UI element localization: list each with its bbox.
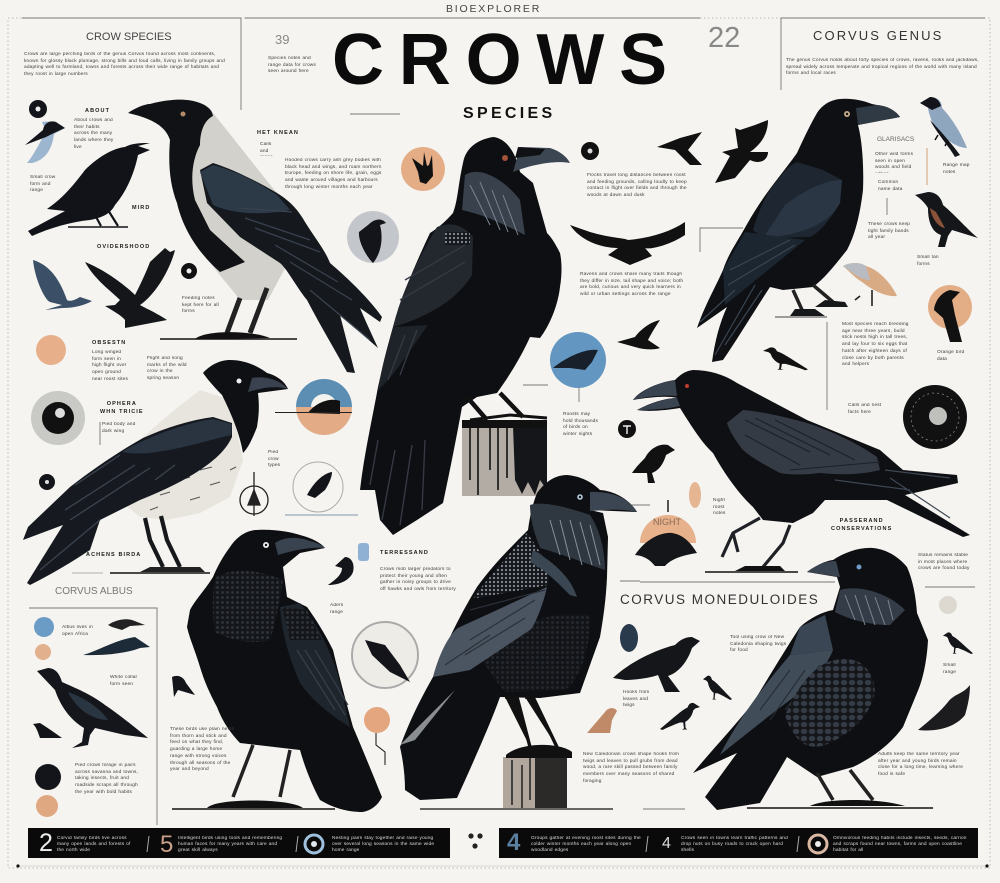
label: mird: MIRD [132, 205, 150, 211]
small bird: centre right [617, 320, 660, 349]
icon: orange tag [689, 482, 701, 508]
icon: black dot top [581, 142, 599, 160]
label: het knean: HET KNEAN [257, 130, 299, 136]
icon: orange small circle [364, 707, 390, 765]
small bird: tan [843, 263, 897, 306]
text: far right low: Orange bird data [937, 350, 964, 362]
icon: night circle with bird [635, 500, 697, 566]
icon: black dot left [39, 474, 55, 490]
text: feeding: Feeding notes kept here for all forms [182, 296, 219, 314]
flying bird: wide black [570, 222, 685, 265]
text: upper right: The genus Corvus holds about forty species of crows, ravens, rooks and jackdaws, spread widely across temperate and tropical regions of the world with many island forms and local races [786, 58, 979, 76]
heading: corvus moneduloides: CORVUS MONEDULOIDES [620, 592, 819, 607]
label: achens: ACHENS BIRDA [86, 552, 141, 558]
small bird: standing [632, 445, 675, 483]
number 22: 22 [708, 22, 740, 54]
bar number 4a: 4 [507, 829, 520, 856]
crow: lower-left [172, 530, 382, 812]
text: far right mid: Status remains stable in most places where crows are found today [918, 553, 970, 571]
label: bioexplorer: BIOEXPLORER [446, 3, 541, 15]
icon: orange circle left [36, 335, 66, 365]
small bird: blue right top [920, 97, 967, 157]
text: centre left: Hooded crows carry ash grey bodies with black head and wings, and roam northern Europe, feeding on shore life, grain, eggs and waste around villages and harbours through long winter months each year [285, 158, 382, 190]
number 39: 39 [275, 32, 289, 47]
bar number 4b: 4 [662, 835, 671, 852]
heading: corvus genus: CORVUS GENUS [813, 28, 943, 43]
label: ophera: WHN TRICIE [100, 409, 144, 415]
text: lower right: Adults keep the same territory year after year and young birds remain close for a long time, learning where food is safe [878, 752, 963, 777]
flying bird: top black [715, 120, 768, 183]
text: seal side: Calls and nest facts here [848, 403, 881, 415]
heading: corvus albus: CORVUS ALBUS [55, 586, 133, 597]
icon: grey ring with bird [31, 391, 85, 445]
label: obsestn: OBSESTN [92, 340, 126, 346]
crow: upper-right [697, 99, 900, 362]
bar text right 3: Omnivorous feeding habits include insects, seeds, carrion and scraps found near towns, farms and open coastline habitat for all [833, 836, 967, 853]
bar text right 2: Crows seen in towns learn traffic patterns and drop nuts on busy roads to crack open hard shells [681, 836, 788, 853]
label: terressand: TERRESSAND [380, 550, 429, 556]
icon: blue circle with bird [550, 332, 606, 388]
text: right column 1b: Common name data [878, 180, 902, 192]
icon: crosshair [240, 472, 268, 516]
title: CROWS [332, 20, 682, 100]
text: albus box 1: Albus lives in open Africa [62, 625, 93, 637]
text: left lower: Pied body and dark wing [102, 422, 135, 434]
icon: black ring dot [181, 263, 197, 279]
label: ophera: OPHERA [107, 401, 137, 407]
text: albus box 2: White collar form seen [110, 675, 137, 687]
flying bird: black [85, 248, 175, 328]
text: far right small: Range map notes [943, 163, 970, 175]
icon: left black circle [29, 100, 47, 118]
icon: blue and orange circle with bird [275, 379, 352, 435]
icon: orange circle with bird [928, 285, 972, 342]
seal: black round [903, 385, 967, 449]
text: centre right top: Flocks travel long distances between roost and feeding grounds, calling loudly to keep contact in flight over fields and through the woods at dawn and dusk [587, 173, 687, 198]
icon: thin circle with bird [285, 462, 358, 515]
text: beside bird: About crows and their habits across the many lands where they live [74, 118, 113, 150]
text: centre right 2: Ravens and crows share many traits though they differ in size, tail shape and voice; both are bold, curious and very quick learners in wild or urban settings across the range [580, 272, 683, 297]
text: right birds: Small range [943, 663, 956, 675]
icon: grey circle with bird [347, 211, 399, 263]
bottom bar left [28, 828, 450, 858]
text: moneduloides side: Tool using crow of New Caledonia shaping twigs for food [730, 635, 786, 653]
text: left middle: Long winged form seen in high flight over open ground near roost sites [92, 350, 128, 382]
bar text left: Corvid family birds live across many open lands and forests of the north wide [57, 836, 130, 853]
bottom dots [468, 833, 483, 849]
text: moneduloides small: Hooks from leaves and twigs [623, 690, 649, 708]
label: ovidershood: OVIDERSHOOD [97, 244, 150, 250]
bar text right 1: Groups gather at evening roost sites during the colder winter months each year along open woodland edges [531, 836, 641, 853]
icon: feather [918, 685, 970, 730]
crow: bottom right [693, 548, 933, 810]
text: right column 2: Most species reach breeding age near three years, build stick nests high in tall trees, and lay four to six eggs that hatch after eighteen days of close care by both parents and helpers [842, 322, 909, 367]
label: about: ABOUT [85, 108, 110, 114]
icon: dot centre right [618, 420, 636, 438]
small bird: brown [915, 192, 978, 247]
bar text left 3: Nesting pairs stay together and raise young over several long seasons in the same wide home range [332, 836, 434, 853]
small bird: black right [763, 347, 808, 370]
text: top left: Crows are large perching birds of the genus Corvus found across most continents, known for glossy black plumage, strong bills and loud calls, living in family groups and adapting well to farmland, towns and forests across their wide range of habitats and they roost in large numbers [24, 52, 225, 77]
seal: bird ring [352, 622, 418, 688]
text: far right mid: Small tan forms [917, 255, 939, 267]
text: moneduloides below: New Caledonian crows shape hooks from twigs and leaves to pull grubs from dead wood, a rare skill passed between family members over many seasons of shared foraging [583, 752, 679, 784]
text: night side: Night roost notes [713, 498, 726, 516]
text: aders: Aders range [330, 603, 343, 615]
bar number 2: 2 [39, 829, 53, 857]
flying bird: blue [33, 260, 92, 310]
icon: blue pill [358, 543, 369, 561]
subtitle: SPECIES [463, 105, 555, 122]
crow: top-left hooded [128, 100, 382, 373]
heading: crow species: CROW SPECIES [86, 31, 172, 43]
text: bottom centre-left: These birds use plain nests from thorn and stick and feed on what they find, guarding a large home range with strong voices through all seasons of the year and beyond [170, 727, 234, 772]
corvus albus icons [33, 617, 195, 817]
text: right column 1c: These crows keep tight family bands all year [868, 222, 910, 240]
bar number 5: 5 [160, 831, 173, 858]
icon: orange hand circle [401, 147, 445, 191]
label: glarisacs: GLARISACS [877, 136, 914, 143]
text: left labels: Small crow form and range [30, 175, 55, 193]
bottom bar right [499, 828, 978, 858]
small bird: left black crow [28, 143, 150, 236]
crow: left hooded lower [23, 360, 288, 585]
label: ophera [100, 401, 144, 415]
text: albus box lower: Pied crows forage in pairs across savanna and towns, taking insects, fruit and roadside scraps all through the year with bold habits [75, 763, 138, 795]
crow: right open-beak [633, 370, 970, 572]
small bird: left blue [25, 121, 65, 163]
crow: bottom centre [400, 475, 637, 809]
text: hooded side: Pied crow types [268, 450, 280, 468]
label: conservations [831, 518, 892, 532]
bar text left 2: Intelligent birds using tools and remembering human faces for many years with care and great skill always [178, 836, 282, 853]
small birds: moneduloides group [587, 624, 973, 733]
label night: NIGHT [653, 517, 681, 527]
small bird: centre [328, 557, 354, 585]
text: under 39: Species notes and range data for crows seen around here [268, 56, 316, 74]
flying bird: top small [657, 132, 702, 165]
icon: light circle right [939, 596, 957, 614]
text: centre post: Roosts may hold thousands of birds on winter nights [563, 412, 598, 437]
crow: centre large on post [360, 137, 570, 535]
label: conservations: PASSERAND [840, 518, 884, 524]
label: conservations: CONSERVATIONS [831, 526, 892, 532]
text: left middle 2: Flight and song marks of the wild crow in the spring season [147, 356, 187, 381]
text: centre lower: Crows mob larger predators to protect their young and often gather in noisy groups to drive off hawks and owls from territory [380, 567, 456, 592]
